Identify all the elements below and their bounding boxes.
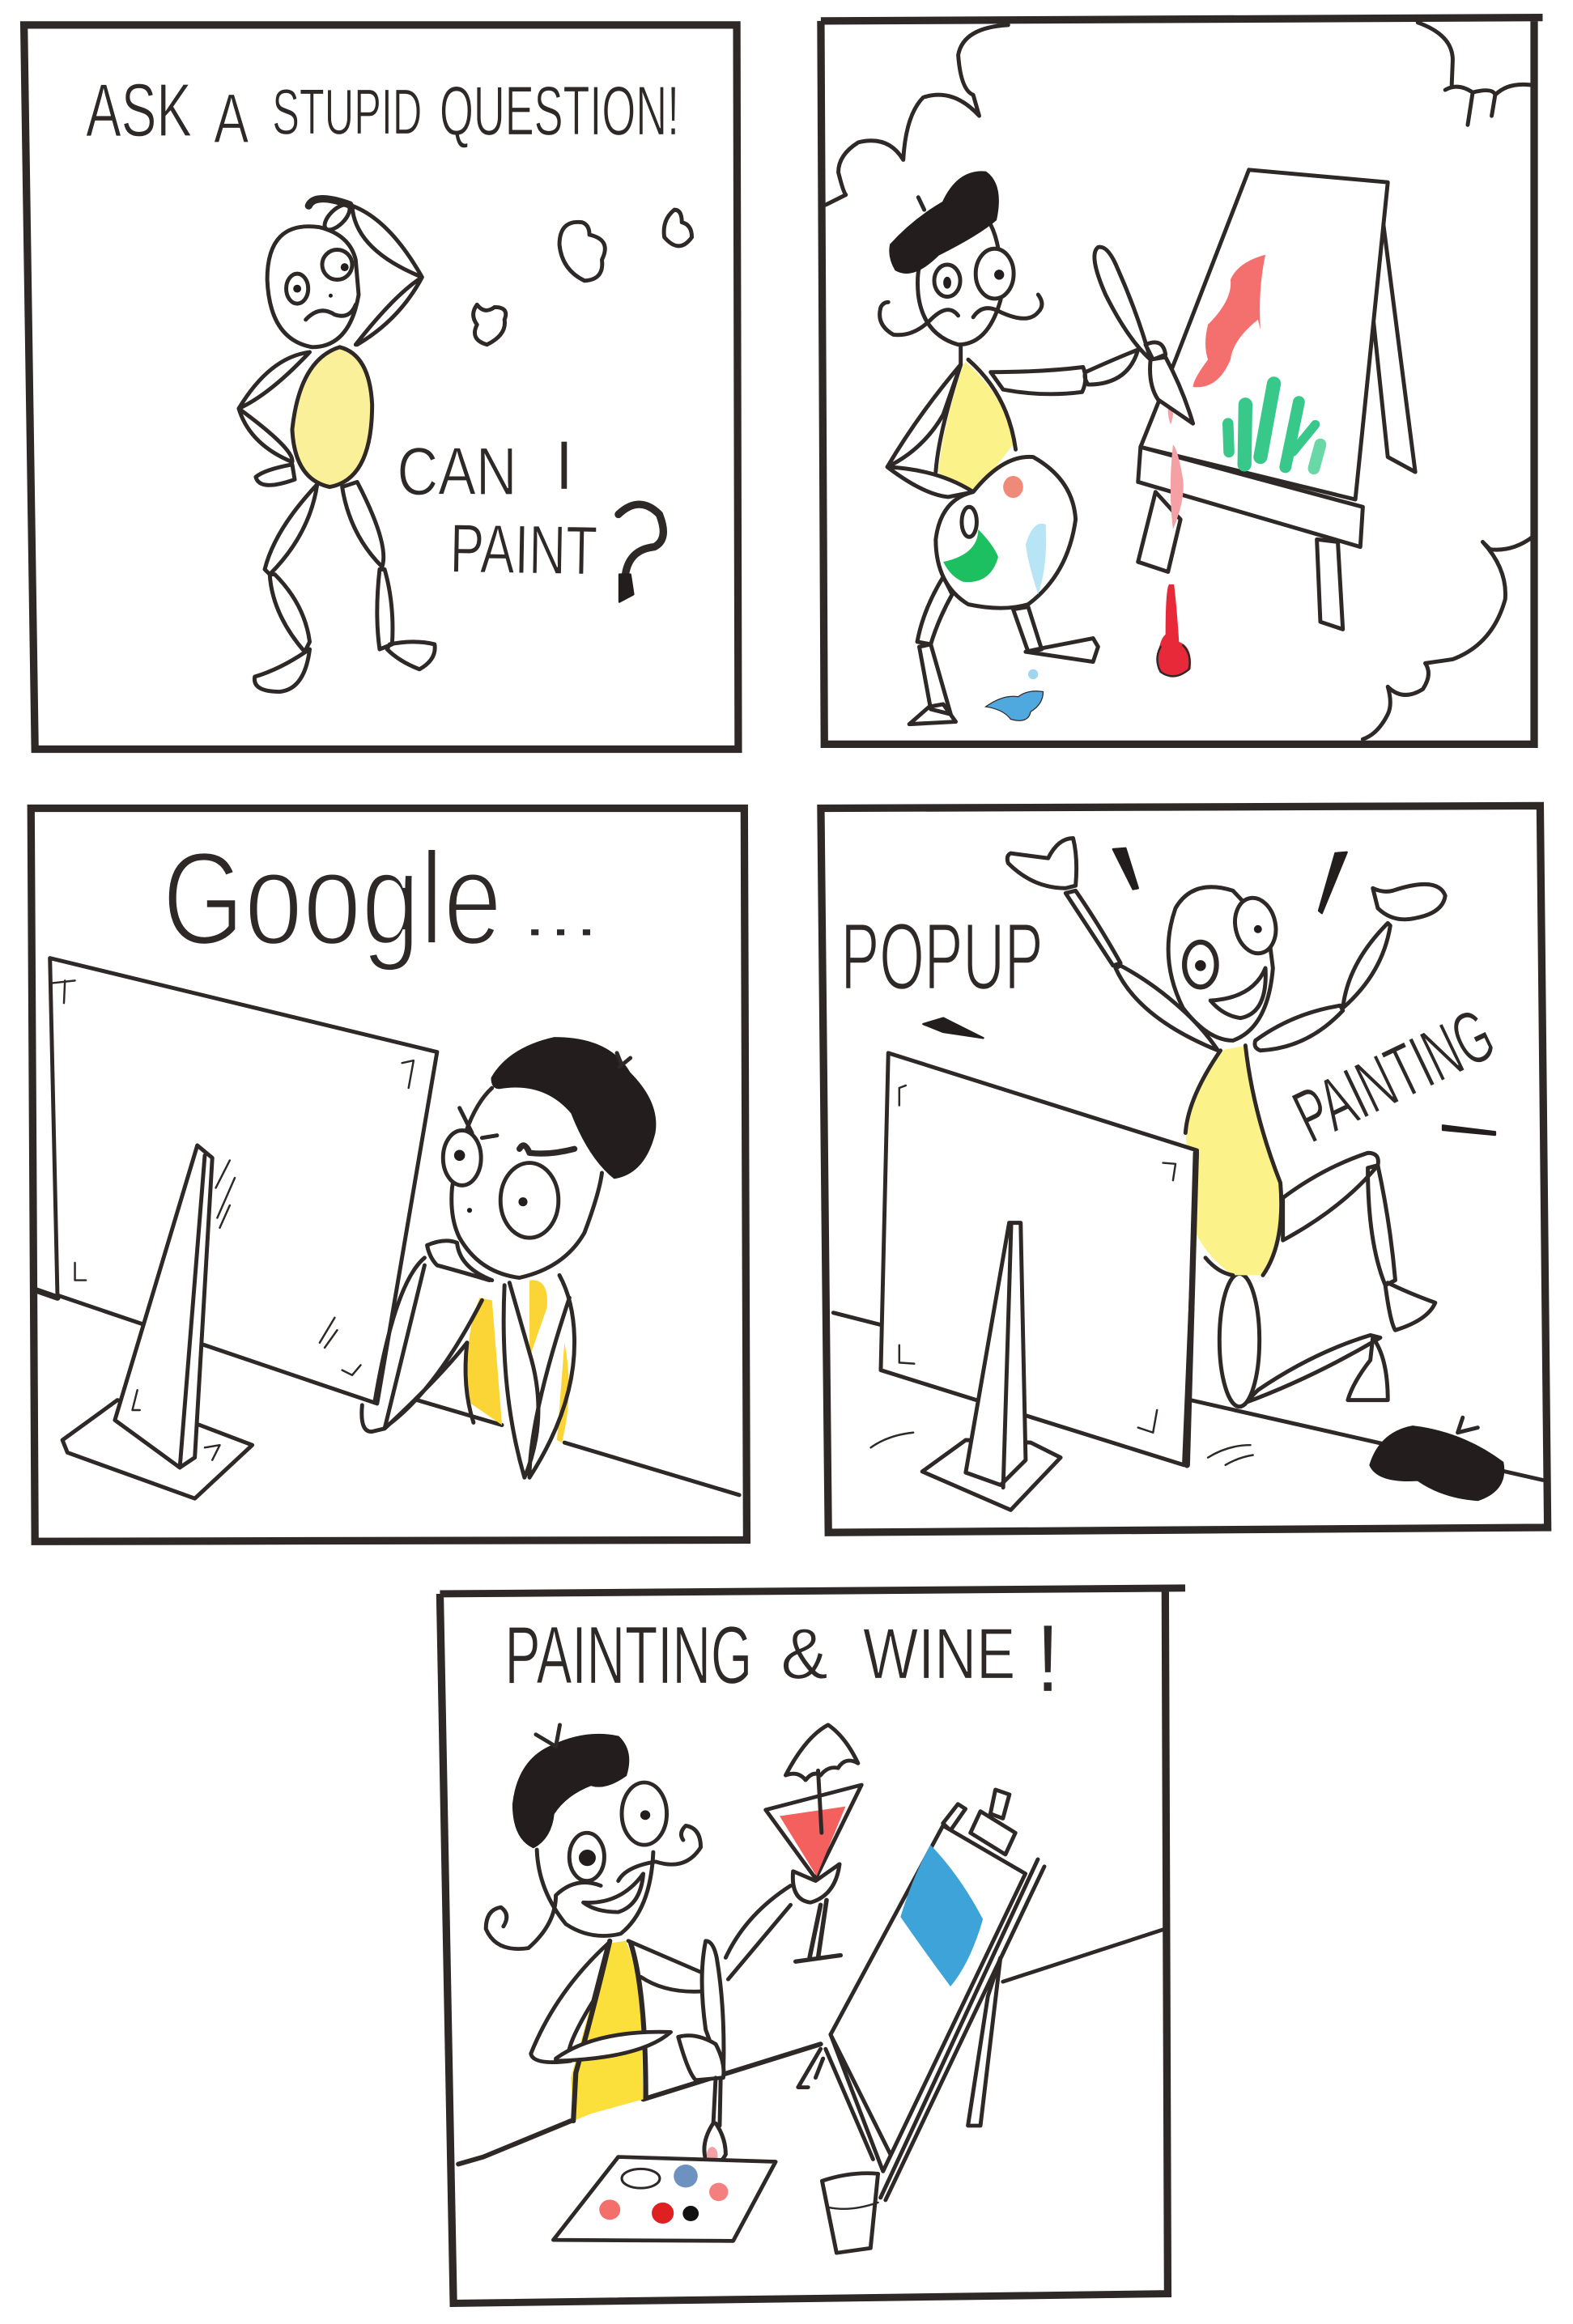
right arm bbox=[991, 350, 1138, 394]
jumping man bbox=[1007, 839, 1445, 1407]
hand on head bbox=[321, 201, 354, 234]
face bbox=[486, 1782, 701, 1949]
heading: ask a stupid question: A bbox=[214, 80, 249, 158]
text: popup: POPUP bbox=[841, 903, 1044, 1009]
thought puffs bbox=[474, 210, 692, 345]
fallen beret bbox=[1371, 1417, 1503, 1500]
raised arm bbox=[352, 206, 422, 345]
excitement marks bbox=[923, 848, 1495, 1135]
right arm bbox=[628, 1886, 791, 1991]
left arm on hip bbox=[239, 352, 310, 485]
blue paint bbox=[900, 1845, 983, 1986]
computer monitor bbox=[881, 1053, 1197, 1510]
heading: painting and wine bbox=[505, 1604, 1061, 1712]
green paint bbox=[1228, 384, 1320, 469]
chin and hand bbox=[427, 1241, 492, 1281]
raised knee leg bbox=[1283, 1153, 1435, 1330]
legs bbox=[909, 577, 1098, 724]
panel 3 frame bbox=[31, 809, 746, 1541]
heading: ask a stupid question: ASK bbox=[86, 68, 192, 152]
man looking at screen bbox=[362, 1038, 655, 1477]
left arm bbox=[531, 1944, 608, 2063]
heading: ask a stupid question bbox=[86, 68, 679, 158]
computer monitor bbox=[36, 958, 437, 1498]
left arm bbox=[362, 1258, 482, 1432]
brush and hand bbox=[702, 1941, 724, 2078]
heading: ask a stupid question: STUPID bbox=[272, 74, 422, 147]
left arm bbox=[887, 364, 973, 497]
heading: painting and wine: PAINTING bbox=[505, 1609, 752, 1701]
desk line bbox=[417, 1400, 739, 1495]
desk line bbox=[833, 1313, 1543, 1480]
easel and canvas bbox=[1138, 170, 1415, 629]
yellow body bbox=[571, 1941, 644, 2121]
painter figure bbox=[880, 172, 1138, 724]
paint drips bbox=[986, 397, 1191, 720]
right leg bbox=[342, 482, 435, 669]
heading: painting and wine: WINE bbox=[863, 1614, 1015, 1694]
heading: google: Google bbox=[163, 824, 502, 972]
head bbox=[267, 227, 359, 347]
panel 4: popup painting bbox=[821, 805, 1548, 1532]
motion lines bbox=[871, 1433, 1253, 1465]
kneeling leg bbox=[1245, 1335, 1388, 1403]
head bbox=[1168, 887, 1273, 1040]
wine glass with umbrella bbox=[766, 1725, 861, 1961]
arms bbox=[1065, 890, 1390, 1051]
panel 5 frame bbox=[440, 1588, 1185, 2303]
head bbox=[452, 1088, 602, 1277]
panel 1 frame bbox=[24, 25, 738, 750]
left leg bbox=[254, 484, 317, 692]
heading: painting and wine: ! bbox=[1035, 1604, 1061, 1712]
eyes bbox=[934, 249, 1014, 299]
eyes and brows bbox=[443, 1108, 575, 1238]
text: can I paint? bbox=[398, 427, 663, 601]
panel 2 frame bbox=[821, 18, 1543, 744]
head bbox=[537, 1790, 653, 1935]
moustache bbox=[880, 295, 1042, 335]
palette bbox=[936, 457, 1076, 608]
beret bbox=[492, 1038, 655, 1178]
brush tip bbox=[704, 2123, 725, 2164]
water glass bbox=[822, 2173, 878, 2253]
text: can I paint?: CAN bbox=[398, 434, 517, 509]
panel 4 frame bbox=[821, 805, 1548, 1532]
thinking figure bbox=[239, 199, 435, 692]
yellow body bbox=[1185, 1046, 1282, 1275]
head bbox=[917, 225, 1001, 345]
heading: google: ... bbox=[522, 877, 599, 950]
heading: ask a stupid question: QUESTION! bbox=[440, 73, 679, 151]
panel 1: ask a stupid question bbox=[24, 25, 738, 750]
beret bbox=[891, 172, 998, 273]
face bbox=[1184, 894, 1281, 1018]
heading: painting and wine: & bbox=[780, 1614, 828, 1694]
panel 5: painting and wine bbox=[440, 1588, 1185, 2303]
text: can I paint?: I bbox=[555, 427, 574, 505]
hands bbox=[1007, 839, 1445, 920]
eyes and mouth bbox=[287, 250, 355, 320]
thought cloud outline bbox=[826, 23, 1533, 739]
painter figure bbox=[486, 1725, 791, 2126]
red paint bbox=[1193, 255, 1265, 387]
text: can I paint?: PAINT bbox=[449, 510, 598, 590]
easel bbox=[798, 1790, 1044, 2200]
paint palette bbox=[554, 2157, 776, 2241]
panel 2: painter bbox=[821, 18, 1543, 744]
yellow body bbox=[292, 347, 372, 487]
panel 3: google bbox=[31, 809, 746, 1541]
hair curl bbox=[308, 199, 350, 206]
right arm bbox=[504, 1275, 575, 1477]
paint brush bbox=[1095, 247, 1193, 423]
yellow shirt bbox=[467, 1280, 569, 1442]
yellow body bbox=[938, 362, 1013, 491]
beret bbox=[513, 1735, 628, 1847]
table line bbox=[458, 2044, 821, 2164]
